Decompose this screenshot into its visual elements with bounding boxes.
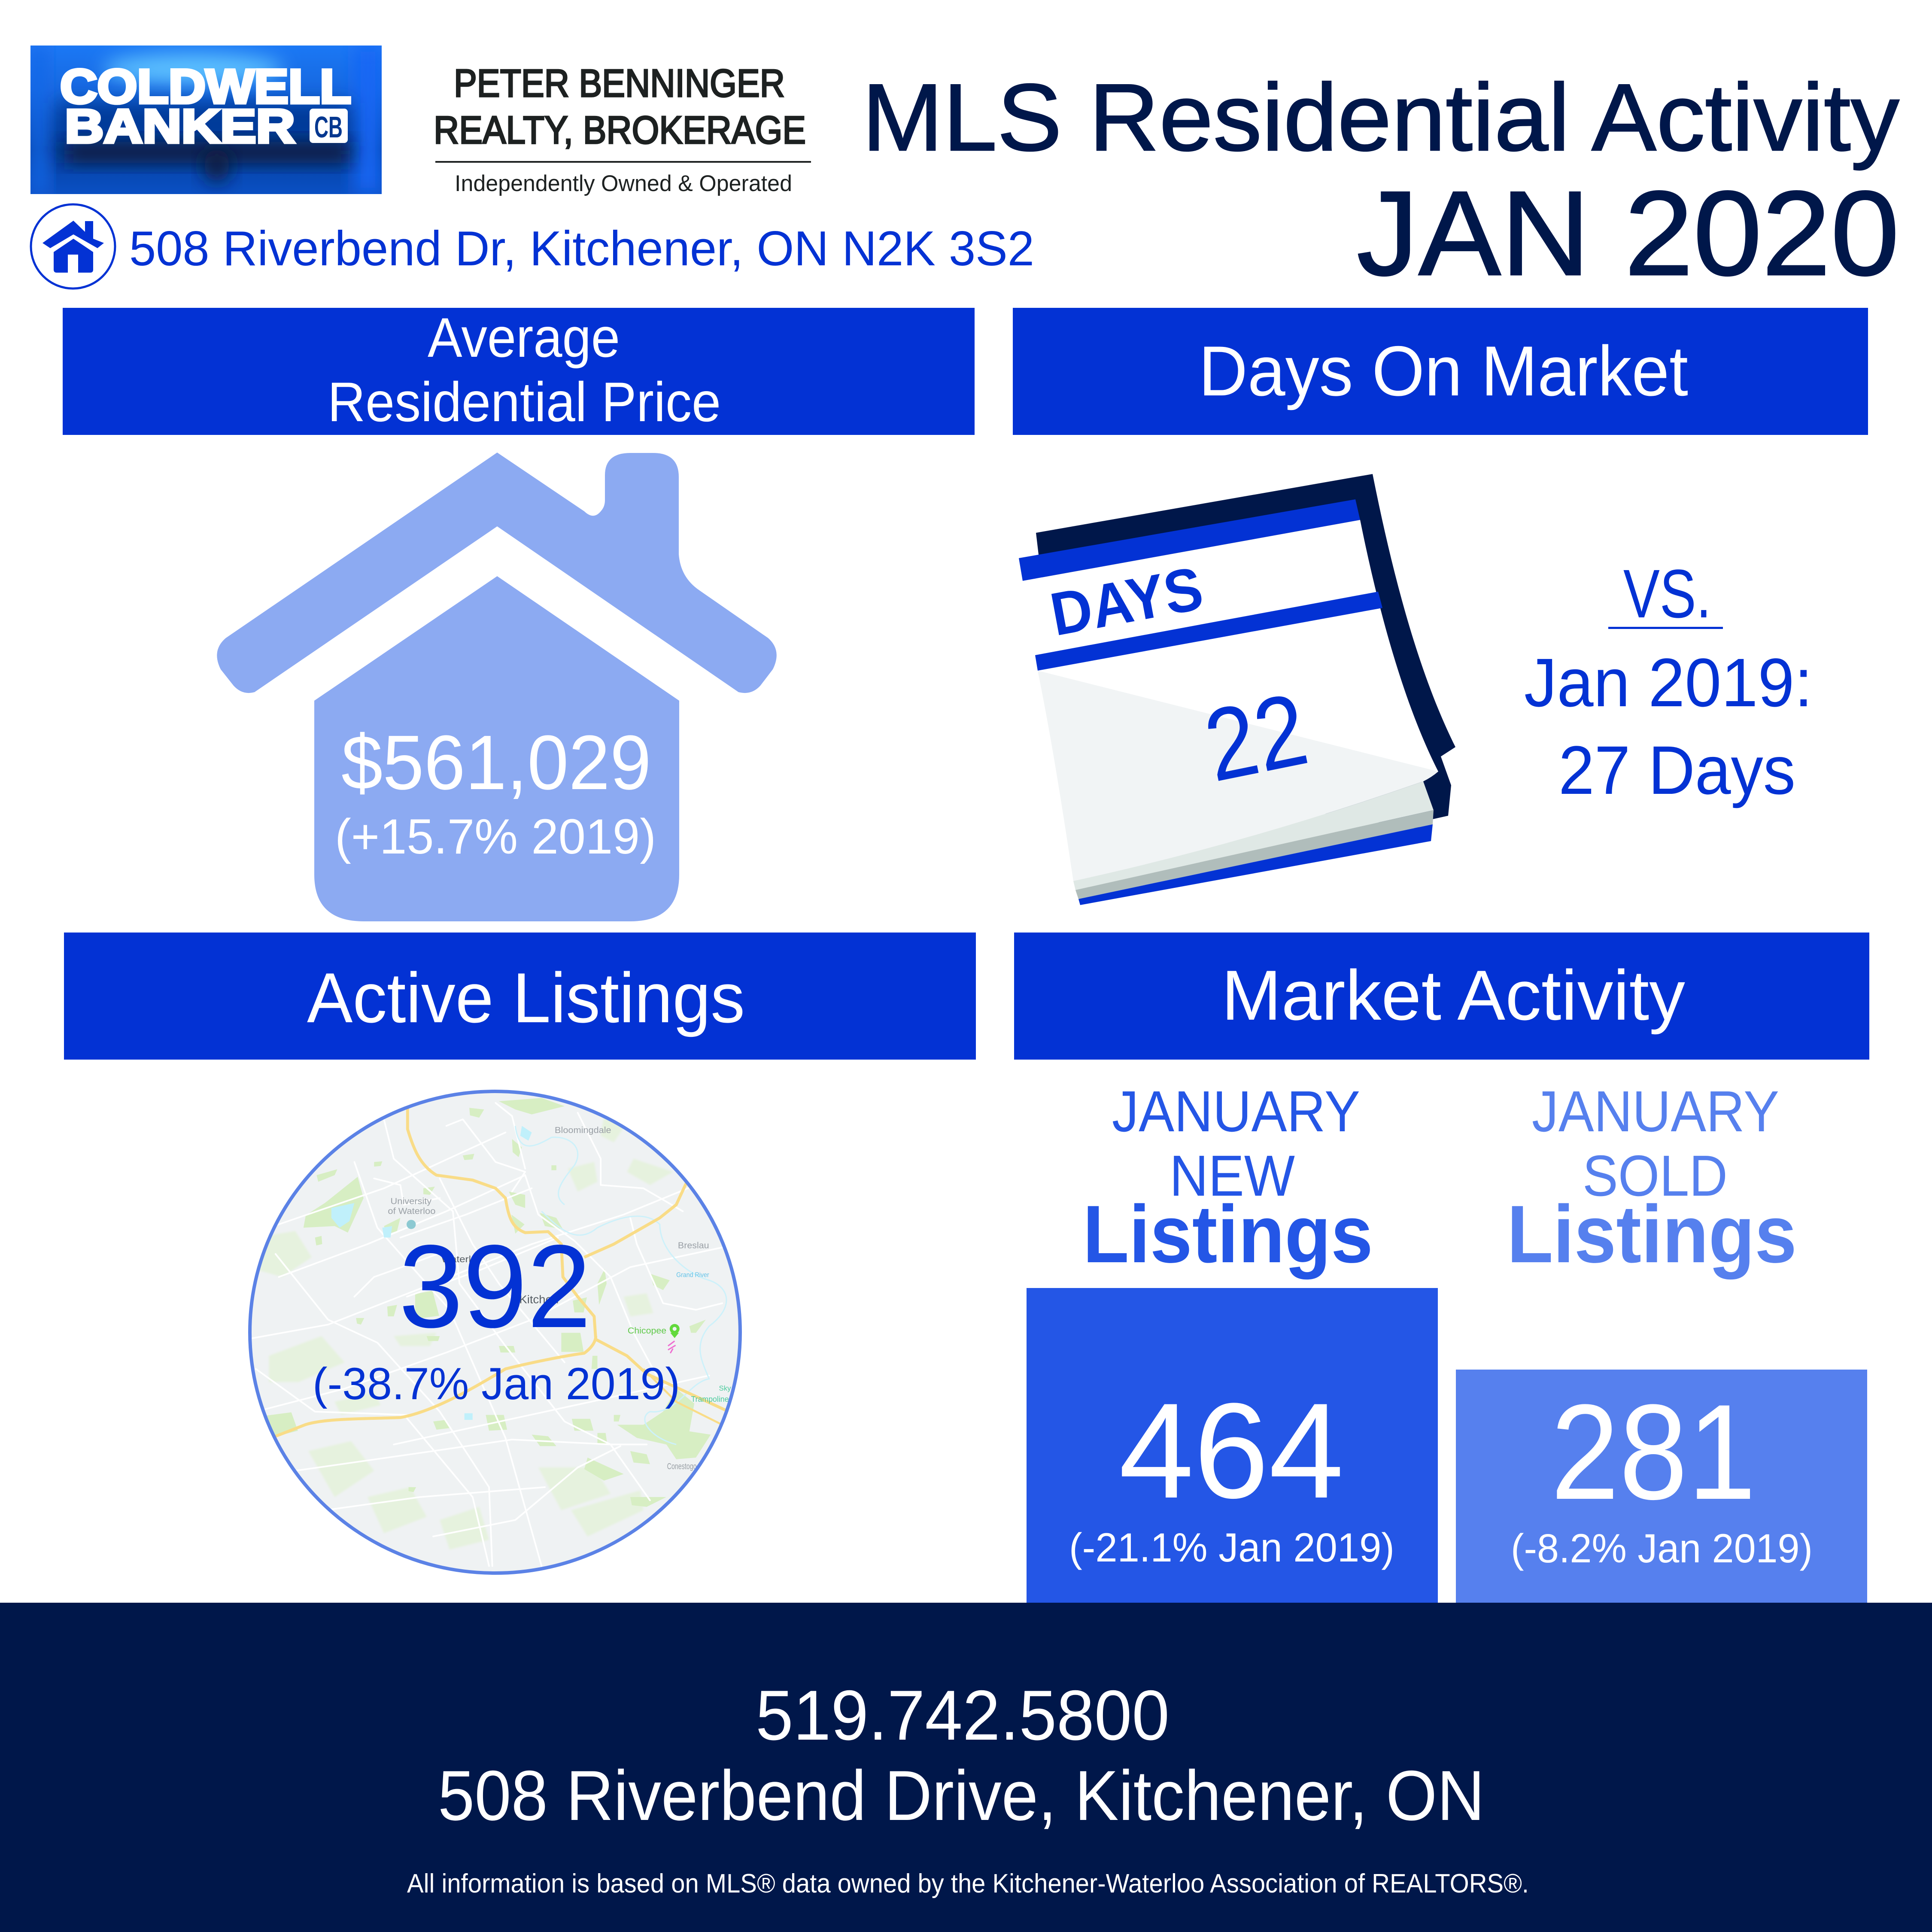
heading: january sold listings: JANUARY <box>1532 1079 1779 1144</box>
price: $561,029 <box>341 720 651 806</box>
brokerage name: PETER BENNINGER <box>454 62 785 105</box>
heading: january sold listings: Listings <box>1507 1189 1797 1280</box>
heading: january new listings: NEW <box>1170 1143 1295 1208</box>
heading: january sold listings: SOLD <box>1583 1143 1728 1208</box>
map: Bloomingdale <box>555 1126 611 1135</box>
footer <box>0 1603 1932 1932</box>
calendar number: 22 <box>1196 672 1316 803</box>
panel header: days on market: Days On Market <box>1199 331 1688 410</box>
active listings count: 392 <box>399 1221 591 1352</box>
bar: sold listings <box>1456 1370 1867 1603</box>
house graphic with average price <box>217 453 777 921</box>
comparison: vs Jan 2019: 27 Days <box>1558 732 1795 808</box>
comparison: vs Jan 2019: VS. <box>1623 555 1711 632</box>
heading: january new listings: JANUARY <box>1112 1079 1360 1144</box>
title: JAN 2020 <box>1357 167 1899 301</box>
map: Breslau <box>678 1241 709 1251</box>
panel header: active listings <box>64 933 976 1060</box>
title <box>862 64 1899 301</box>
calendar label: DAYS <box>1045 554 1208 649</box>
panel header: average residential price <box>63 306 975 435</box>
change: new listings: (-21.1% Jan 2019) <box>1069 1525 1394 1571</box>
heading: january new listings: Listings <box>1083 1189 1373 1280</box>
calendar graphic <box>1019 474 1455 905</box>
logo: Coldwell Banker: BANKER <box>65 100 295 153</box>
map circle with active listings <box>248 1090 742 1575</box>
map <box>252 1093 738 1571</box>
comparison: vs Jan 2019 <box>1524 555 1813 808</box>
change: sold listings: (-8.2% Jan 2019) <box>1511 1526 1813 1571</box>
bar: new listings <box>1027 1288 1438 1603</box>
active listings change: (-38.7% Jan 2019) <box>313 1359 680 1409</box>
disclaimer: All information is based on MLS® data owned by the Kitchener-Waterloo Association of REALTORS®. <box>407 1869 1529 1899</box>
value: 464: 464 <box>1119 1375 1344 1526</box>
map: Kitchen <box>519 1293 559 1306</box>
map: of Waterloo <box>388 1206 435 1216</box>
icon: house roof <box>217 453 777 693</box>
price change: (+15.7% 2019) <box>335 809 656 864</box>
panel header: average residential price: Residential Price <box>328 371 721 433</box>
address line: 508 Riverbend Dr, Kitchener, ON N2K 3S2 <box>129 222 1034 276</box>
logo: Coldwell Banker: COLDWELL <box>60 60 351 113</box>
logo: Coldwell Banker <box>30 46 382 194</box>
heading: january sold listings <box>1507 1079 1797 1280</box>
heading: january new listings <box>1083 1079 1373 1280</box>
footer address: 508 Riverbend Drive, Kitchener, ON <box>438 1756 1485 1835</box>
map: Waterl <box>441 1254 471 1264</box>
map: Conestogo <box>667 1462 697 1471</box>
panel header: market activity <box>1014 933 1869 1060</box>
comparison: vs Jan 2019: Jan 2019: <box>1524 644 1813 721</box>
brokerage name <box>434 62 811 196</box>
brokerage name: REALTY, BROKERAGE <box>434 109 806 152</box>
column: new listings <box>1027 1079 1438 1603</box>
logo: Coldwell Banker: CB <box>314 110 343 144</box>
panel header: market activity: Market Activity <box>1221 956 1686 1035</box>
map: University <box>391 1197 431 1206</box>
icon: house body <box>314 576 679 921</box>
map: Chicopee <box>628 1326 666 1336</box>
map: Grand River <box>676 1271 709 1279</box>
panel header: active listings: Active Listings <box>307 958 745 1037</box>
map: Sky <box>719 1384 731 1392</box>
map: Trampoline <box>691 1394 729 1403</box>
panel header: average residential price: Average <box>428 306 620 369</box>
panel header: days on market <box>1013 308 1868 435</box>
column: sold listings <box>1456 1079 1867 1603</box>
footer phone: 519.742.5800 <box>756 1676 1170 1755</box>
brokerage name: Independently Owned & Operated <box>455 171 792 196</box>
title: MLS Residential Activity <box>862 64 1899 171</box>
value: 281: 281 <box>1551 1376 1756 1528</box>
icon: address house <box>31 204 115 289</box>
